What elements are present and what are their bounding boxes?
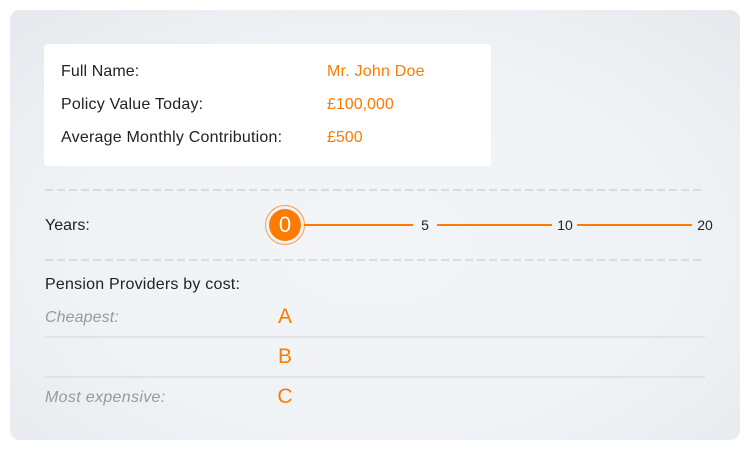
tick: 5 years: 5 — [421, 217, 429, 233]
label: cheapest: Cheapest: — [45, 309, 119, 326]
label: full name: Full Name: — [61, 63, 139, 80]
label: most expensive: Most expensive: — [45, 389, 166, 406]
marker number: 0 — [279, 212, 291, 237]
marker: selected year 0 — [265, 205, 305, 245]
value: monthly contribution: £500 — [327, 129, 363, 146]
label: years: Years: — [45, 217, 90, 234]
provider A: A — [278, 305, 292, 328]
tick: 10 years: 10 — [557, 217, 573, 233]
provider C: C — [277, 385, 293, 408]
value: full name: Mr. John Doe — [327, 63, 425, 80]
label: policy value: Policy Value Today: — [61, 96, 203, 113]
label: monthly contribution: Average Monthly Contribution: — [61, 129, 282, 146]
tick: 20 years: 20 — [697, 217, 713, 233]
marker number — [269, 209, 301, 241]
heading: pension providers: Pension Providers by cost: — [45, 276, 240, 293]
value: policy value: £100,000 — [327, 96, 394, 113]
provider B: B — [278, 345, 292, 368]
panel: policy details card — [44, 44, 491, 166]
